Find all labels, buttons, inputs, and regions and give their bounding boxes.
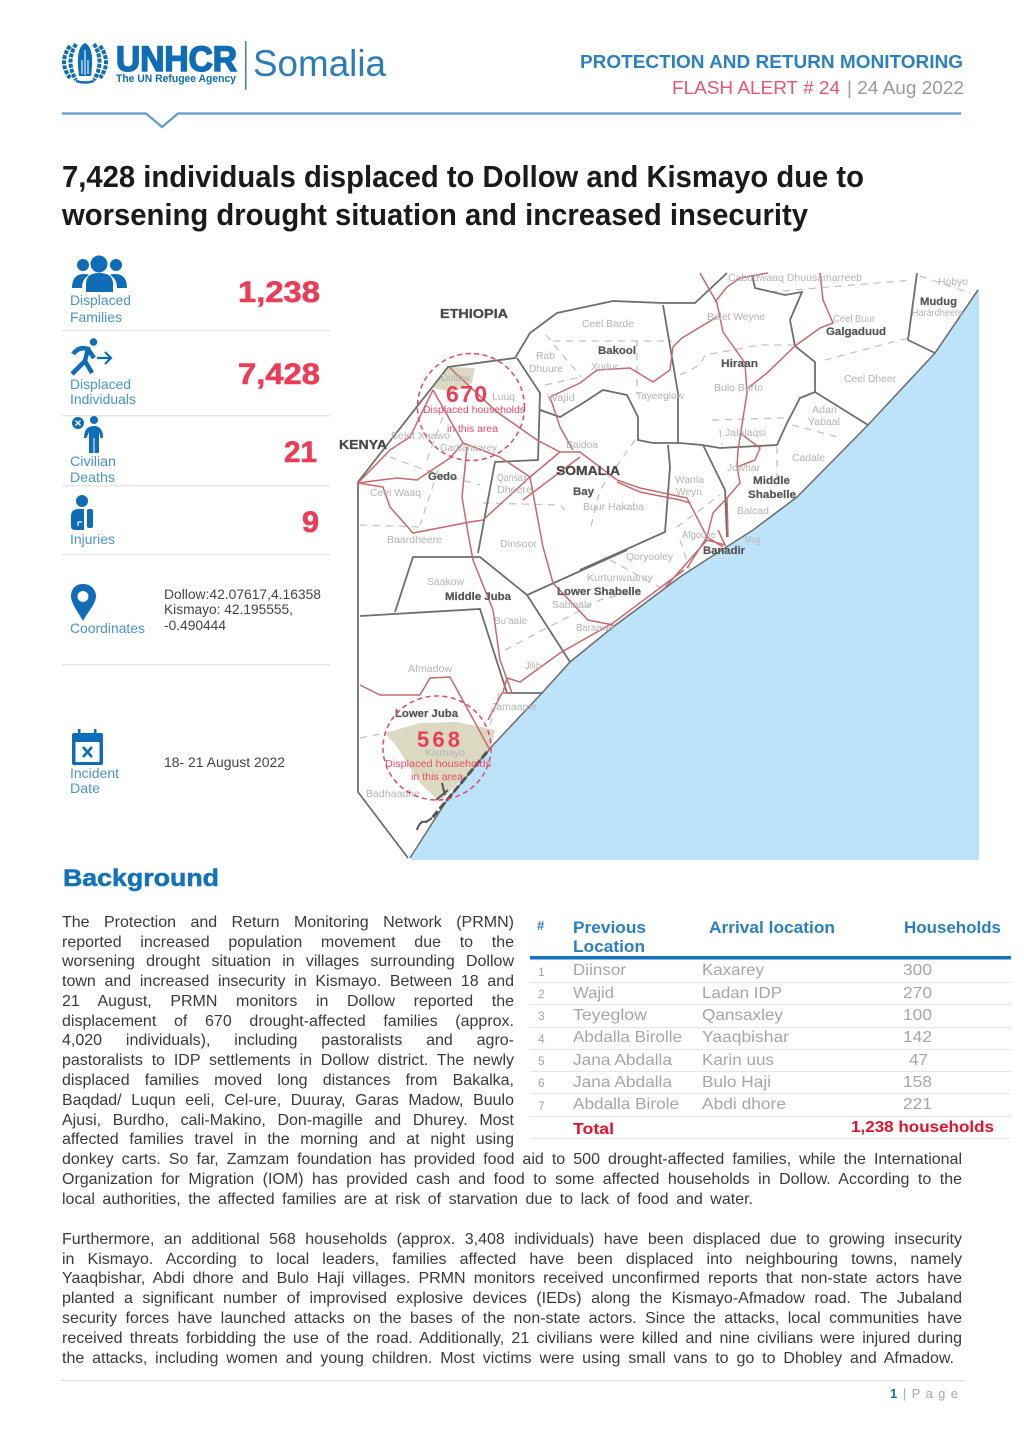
district labels: Tayeeglow [636, 391, 685, 402]
callout: Kismayo 568 households [383, 696, 491, 800]
page number: 1 [890, 1386, 897, 1401]
table rows: 100 [903, 1007, 932, 1024]
table rows: Yaaqbishar [702, 1029, 790, 1046]
text block: background paragraph 1: Ajusi, Burdho, cali-Makino, Don-magille and Dhurey. Most [62, 1112, 514, 1129]
title: 7,428 individuals displaced to Dollow and Kismayo due to [62, 159, 864, 194]
table rows: Bulo Haji [702, 1074, 771, 1091]
sea [410, 288, 979, 860]
label: displaced individuals: Displaced [70, 376, 131, 392]
district labels: Yabaal [808, 417, 840, 428]
table header: Location [573, 938, 645, 956]
district labels: Qoryooley [626, 552, 673, 563]
text block: background paragraph 2: Furthermore, an additional 568 households (approx. 3,408 individuals) have been displaced due to growing insecurity [62, 1231, 962, 1248]
table header: Previous [573, 919, 646, 937]
table: displacement by location [530, 918, 1011, 1139]
table rows: 300 [903, 962, 932, 979]
table rows: Diinsor [573, 962, 627, 979]
callout: Dollow 670 households: 670 [446, 381, 487, 407]
page number: | P a g e [903, 1386, 958, 1401]
district labels: Ceel Dheer [844, 374, 897, 385]
region labels: Galgaduud [826, 326, 886, 338]
district labels: Jowhar [727, 463, 761, 474]
district labels: Kismayo [425, 748, 465, 759]
callout: Kismayo 568 households: in this area [411, 772, 463, 783]
text block: background paragraph 1: The Protection and Return Monitoring Network (PRMN) [62, 914, 514, 931]
text block: background paragraph 1: worsening drought situation in villages surrounding Dollow [62, 953, 514, 970]
region labels: Mudug [920, 296, 957, 308]
table rows: 270 [903, 985, 932, 1002]
district labels: Baidoa [566, 440, 598, 451]
icon: running person [72, 338, 111, 374]
table rows: 3 [538, 1009, 545, 1023]
table rows: 2 [538, 987, 545, 1001]
country labels: ETHIOPIA [440, 306, 509, 321]
country labels [339, 306, 621, 478]
label: incident date: Date [70, 780, 100, 796]
district labels: Adan [812, 405, 837, 416]
header: report title and date: FLASH ALERT # 24 [672, 78, 840, 98]
logo tagline: The UN Refugee Agency [116, 73, 237, 85]
district labels: Cadale [792, 453, 825, 464]
figure: deaths: 21 [284, 436, 317, 469]
district labels: Wajid [547, 393, 575, 404]
country name: Somalia [253, 42, 386, 84]
region labels: Gedo [428, 471, 457, 483]
icon: injuries [71, 495, 93, 530]
header: report title and date: | 24 Aug 2022 [847, 78, 964, 98]
region labels [395, 296, 957, 720]
district labels: Jalalaqsi [725, 428, 766, 439]
table rows: Ladan IDP [702, 985, 782, 1002]
header rule with notch [62, 114, 961, 127]
district labels: Ceel Buur [833, 314, 876, 325]
table total row: 1,238 households [851, 1119, 994, 1136]
text: coordinates values: -0.490444 [164, 618, 226, 633]
table rows: Jana Abdalla [573, 1052, 672, 1069]
label: displaced individuals: Individuals [70, 391, 136, 407]
text block: background paragraph 1: donkey carts. So far, Zamzam foundation has provided food aid to 500 drought-affected families, while the International [62, 1151, 962, 1168]
label: coordinates: Coordinates [70, 620, 145, 636]
logo wordmark: UNHCR [116, 40, 237, 79]
district labels: Ceel Waaq [370, 488, 421, 499]
text block: background paragraph 1: local authorities, the affected families are at risk of starvation due to lack of food and water. [62, 1191, 753, 1208]
district labels: Garbahaarey [440, 443, 497, 454]
district labels: Hobyo [938, 277, 968, 288]
label: displaced families [70, 292, 131, 325]
figure: individuals: 7,428 [238, 358, 320, 391]
panel: key figures [62, 256, 330, 796]
map: Somalia south-central [339, 273, 979, 860]
district labels: Qansax [497, 473, 527, 484]
table rows: Karin uus [702, 1052, 774, 1069]
label: civilian deaths: Deaths [70, 469, 115, 485]
table rows: 221 [903, 1096, 932, 1113]
table rows: Qansaxley [702, 1007, 783, 1024]
title [61, 159, 864, 232]
district labels: Dheere [497, 485, 532, 496]
coastline [410, 290, 978, 858]
table rows: 47 [909, 1052, 928, 1069]
text block: background paragraph 1: affected families travel in the morning and at night using [62, 1131, 514, 1148]
district labels: Weyn [676, 487, 702, 498]
icon: families [72, 256, 127, 292]
district labels: Harardheere [912, 308, 963, 319]
district labels: Bulo Burto [714, 383, 763, 394]
figure: injuries: 9 [302, 506, 319, 539]
header: report title and date: PROTECTION AND RETURN MONITORING [580, 51, 963, 72]
text block: background paragraph 2 [62, 1231, 962, 1367]
district labels: Bu'aale [494, 616, 527, 627]
table header: Arrival location [709, 919, 835, 937]
district labels: Ceel Barde [582, 319, 634, 330]
roads [358, 273, 833, 750]
district labels: Afmadow [408, 664, 453, 675]
table header [537, 918, 1001, 956]
icon: calendar [72, 729, 103, 765]
table rows [538, 962, 932, 1113]
district labels: Jilib [525, 661, 541, 672]
text block: background paragraph 1: displacement of 670 drought-affected families (approx. [62, 1013, 514, 1030]
region labels: Lower Juba [395, 708, 459, 720]
district dashed boundaries [360, 276, 970, 738]
table rows: 4 [538, 1032, 545, 1046]
text block: background paragraph 2: received threats forbidding the use of the road. Additionally, 21 civilians were killed and nine civilians were injured during [62, 1330, 962, 1347]
text block: background paragraph 2: in Kismayo. According to local leaders, families affected have been displaced into neighbouring towns, namely [62, 1251, 962, 1268]
label: incident date: Incident [70, 765, 119, 781]
text: incident date value: 18- 21 August 2022 [164, 755, 285, 770]
title: worsening drought situation and increased insecurity [61, 197, 809, 232]
table rows: 5 [538, 1054, 545, 1068]
district labels: Wanla [675, 475, 704, 486]
table rows: 6 [538, 1076, 545, 1090]
callout: Kismayo 568 households: 568 [417, 727, 460, 752]
table rows: Wajid [573, 985, 614, 1002]
label: displaced families: Displaced [70, 292, 131, 308]
table rows: Teyeglow [573, 1007, 647, 1024]
text block: background paragraph 1: Organization for Migration (IOM) has provided cash and food to some affected households in Dollow. According to the [62, 1171, 962, 1188]
table rows: Abdi dhore [702, 1096, 786, 1113]
footer rule [60, 1380, 965, 1381]
icon: UN emblem [64, 43, 106, 82]
district labels [366, 273, 968, 800]
district labels: Saakow [427, 577, 465, 588]
highlighted districts [385, 367, 495, 802]
district labels: Belet Weyne [707, 312, 765, 323]
label: civilian deaths [70, 453, 116, 485]
region labels: Lower Shabelle [557, 586, 641, 598]
callout: Dollow 670 households [418, 354, 525, 460]
district labels: Baraawe [576, 623, 614, 634]
district labels: Cabudwaaq Dhuusamarreeb [728, 273, 862, 284]
icon: civilian death [72, 416, 103, 453]
district labels: Dollow [441, 373, 471, 384]
table rows: Kaxarey [702, 962, 764, 979]
text block: background paragraph 2: Yaaqbishar, Abdi dhore and Bulo Haji villages. PRMN monitors received unconfirmed reports that non-state actors have [62, 1270, 962, 1287]
text: coordinates values: Kismayo: 42.195555, [164, 602, 293, 617]
callout: Dollow 670 households: Displaced households [423, 405, 525, 416]
text block: background paragraph 2: planted a significant number of improvised explosive devices (IEDs) along the Kismayo-Afmadow road. The Jubaland [62, 1290, 962, 1307]
district labels: Balcad [737, 506, 769, 517]
district labels: Afgooye [682, 530, 716, 541]
figure: families: 1,238 [238, 276, 320, 309]
text: coordinates values: Dollow:42.07617,4.16358 [164, 587, 321, 602]
district labels: Rab [536, 351, 555, 362]
heading: Background: Background [63, 865, 219, 892]
text block: background paragraph 1: town and increased insecurity in Kismayo. Between 18 and [62, 973, 514, 990]
district labels: Belet Xaawo [391, 431, 450, 442]
text block: background paragraph 2: the attacks, including women and young children. Most victims were using small vans to go to Dhobley and Afmadow. [62, 1350, 954, 1367]
table rows: 1 [538, 965, 545, 979]
icon: location pin [71, 584, 96, 621]
region labels: Bay [573, 486, 595, 498]
district labels: Dinsoor [500, 539, 538, 550]
district labels: Sablaale [552, 600, 592, 611]
label: injuries: Injuries [70, 531, 115, 547]
table total row: Total [573, 1121, 614, 1138]
table rows: Abdalla Birolle [573, 1029, 682, 1046]
text block: background paragraph 1: displaced families moved long distances from Bakalka, [62, 1072, 514, 1089]
header: report title and date [580, 51, 964, 98]
table rows: 158 [903, 1074, 932, 1091]
callout: Kismayo 568 households: Displaced households [385, 759, 491, 770]
callout: Dollow 670 households: in this area [447, 424, 498, 435]
table header: Households [904, 919, 1001, 937]
table rows: 142 [903, 1029, 932, 1046]
region labels: Middle Juba [445, 591, 512, 603]
table rows: 7 [538, 1099, 545, 1113]
text block: background paragraph 1: Baqdad/ Luqun eeli, Cel-ure, Duuray, Garas Madow, Buulo [62, 1092, 514, 1109]
region labels: Bakool [598, 345, 636, 357]
region labels: Shabelle [748, 489, 796, 501]
table rows: Abdalla Birole [573, 1096, 679, 1113]
header: UNHCR Somalia logo [64, 40, 386, 90]
text: coordinates values [164, 587, 321, 633]
district labels: Luuq [492, 392, 515, 403]
text block: background paragraph 1: pastoralists to IDP settlements in Dollow district. The newly [62, 1052, 514, 1069]
region labels: Hiraan [721, 358, 758, 370]
district labels: Baardheere [387, 535, 442, 546]
district labels: Dhuure [529, 364, 563, 375]
text block: background paragraph 1: 21 August, PRMN monitors in Dollow reported the [62, 993, 514, 1010]
text block: background paragraph 1: reported increased population movement due to the [62, 934, 514, 951]
district labels: Jamaame [491, 702, 537, 713]
label: displaced families: Families [70, 309, 122, 325]
country labels: SOMALIA [556, 463, 621, 478]
text block: background paragraph 2: security forces have launched attacks on the bases of the non-state actors. Since the attacks, local communities have [62, 1310, 962, 1327]
district labels: Kurtunwaarey [587, 573, 653, 584]
country labels: KENYA [339, 437, 388, 452]
region labels: Middle [753, 475, 790, 487]
text block: background paragraph 1 [62, 914, 962, 1208]
district labels: Xudur [591, 362, 619, 373]
text block: background paragraph 1: 4,020 individuals), including pastoralists and agro- [62, 1032, 514, 1049]
table header: # [537, 918, 545, 933]
label: displaced individuals [70, 376, 136, 407]
label: civilian deaths: Civilian [70, 453, 116, 469]
district labels: Mog [745, 535, 760, 546]
region labels: Banadir [703, 545, 746, 557]
region boundaries [358, 273, 935, 858]
district labels: Badhaadhe [366, 789, 420, 800]
label: incident date [70, 765, 119, 796]
table rows: Jana Abdalla [573, 1074, 672, 1091]
table total row [573, 1119, 994, 1138]
district labels: Buur Hakaba [583, 502, 644, 513]
